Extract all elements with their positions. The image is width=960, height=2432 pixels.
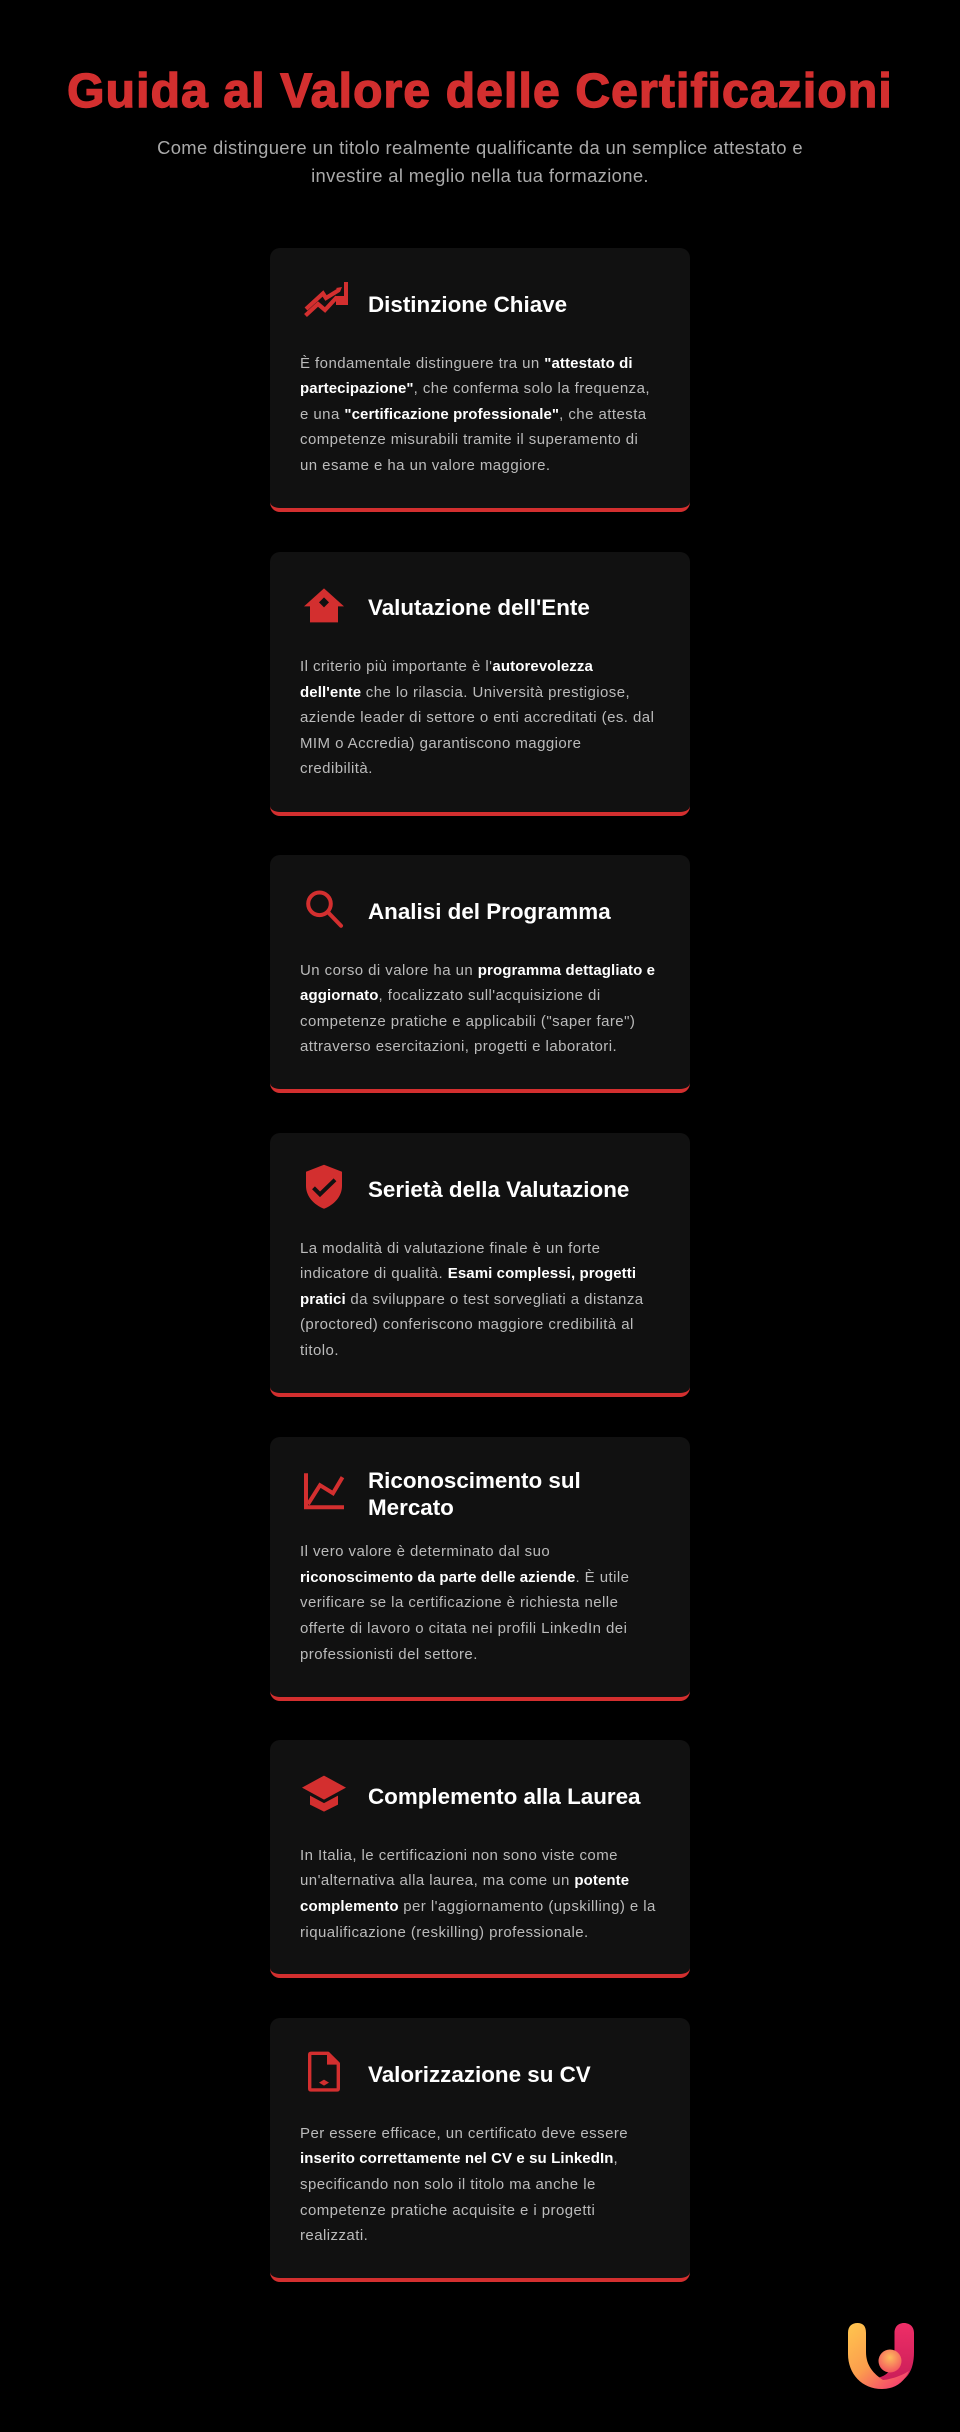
logo	[848, 2323, 914, 2389]
panel: Riconoscimento sul Mercato	[270, 1437, 690, 1701]
heading: Mercato	[368, 1495, 454, 1520]
panel: Analisi del Programma	[270, 855, 690, 1093]
text block: MIM o Accredia) garantiscono maggiore	[300, 735, 581, 752]
text block	[300, 658, 654, 777]
panel: Serietà della Valutazione	[270, 1133, 690, 1397]
heading: Distinzione Chiave	[368, 292, 567, 316]
subtitle: investire al meglio nella tua formazione.	[311, 165, 649, 186]
text block	[300, 1847, 656, 1941]
icon: house	[304, 588, 344, 622]
panel: Complemento alla Laurea	[270, 1740, 690, 1978]
text block: inserito correttamente nel CV e su LinkedIn,	[300, 2150, 618, 2167]
text block	[300, 1240, 644, 1359]
text block	[300, 2125, 628, 2244]
text block: competenze pratiche acquisite e i progetti	[300, 2202, 595, 2219]
text block: competenze misurabili tramite il superamento di	[300, 431, 638, 448]
text block: competenze pratiche e applicabili ("saper fare")	[300, 1013, 635, 1030]
text block: È fondamentale distinguere tra un "attestato di	[300, 354, 633, 372]
title: Guida al Valore delle Certificazioni	[67, 65, 893, 118]
icon: rising chart arrows	[304, 282, 348, 317]
heading: Valutazione dell'Ente	[368, 595, 590, 620]
text block	[300, 1543, 629, 1663]
text block: un esame e ha un valore maggiore.	[300, 457, 550, 474]
subtitle: Come distinguere un titolo realmente qualificante da un semplice attestato e	[157, 136, 803, 158]
icon: graduation cap	[302, 1776, 346, 1812]
heading: Complemento alla Laurea	[368, 1784, 640, 1809]
text block: un'alternativa alla laurea, ma come un potente	[300, 1872, 629, 1889]
panel: Valorizzazione su CV	[270, 2018, 690, 2282]
text block: verificare se la certificazione è richiesta nelle	[300, 1594, 618, 1611]
text block: e una "certificazione professionale", che attesta	[300, 406, 647, 423]
text block: Per essere efficace, un certificato deve essere	[300, 2125, 628, 2142]
text block: riconoscimento da parte delle aziende. È utile	[300, 1569, 629, 1586]
icon: magnifying glass	[306, 890, 344, 928]
heading	[368, 1468, 581, 1520]
text block: La modalità di valutazione finale è un forte	[300, 1240, 600, 1257]
text block	[300, 962, 655, 1055]
text block: offerte di lavoro o citata nei profili LinkedIn dei	[300, 1620, 627, 1637]
panel: Valutazione dell'Ente	[270, 552, 690, 816]
text block	[300, 354, 650, 474]
panel: Distinzione Chiave	[270, 248, 690, 512]
text block: pratici da sviluppare o test sorvegliati a distanza	[300, 1291, 644, 1308]
heading: Riconoscimento sul	[368, 1468, 581, 1493]
text block: titolo.	[300, 1342, 339, 1359]
icon: document	[308, 2052, 340, 2092]
text block: Un corso di valore ha un programma dettagliato e	[300, 962, 655, 979]
text block: indicatore di qualità. Esami complessi, progetti	[300, 1265, 636, 1282]
text block: aggiornato, focalizzato sull'acquisizione di	[300, 987, 601, 1004]
text block: Il criterio più importante è l'autorevolezza	[300, 658, 593, 675]
text block: In Italia, le certificazioni non sono viste come	[300, 1847, 618, 1864]
text block: credibilità.	[300, 760, 373, 777]
text block: aziende leader di settore o enti accreditati (es. dal	[300, 709, 654, 726]
text block: partecipazione", che conferma solo la frequenza,	[300, 380, 650, 397]
text block: professionisti del settore.	[300, 1646, 478, 1663]
heading: Serietà della Valutazione	[368, 1177, 629, 1202]
text block: (proctored) conferiscono maggiore credibilità al	[300, 1316, 634, 1333]
text block: specificando non solo il titolo ma anche le	[300, 2176, 596, 2193]
icon: shield with check	[306, 1164, 342, 1209]
text block: complemento per l'aggiornamento (upskilling) e la	[300, 1898, 656, 1915]
subtitle	[157, 136, 803, 186]
heading: Valorizzazione su CV	[368, 2062, 591, 2087]
heading: Analisi del Programma	[368, 899, 611, 924]
text block: dell'ente che lo rilascia. Università prestigiose,	[300, 684, 630, 701]
icon: line chart	[304, 1473, 344, 1510]
text block: riqualificazione (reskilling) professionale.	[300, 1924, 589, 1941]
text block: realizzati.	[300, 2227, 368, 2244]
text block: Il vero valore è determinato dal suo	[300, 1543, 550, 1560]
text block: attraverso esercitazioni, progetti e laboratori.	[300, 1038, 617, 1055]
